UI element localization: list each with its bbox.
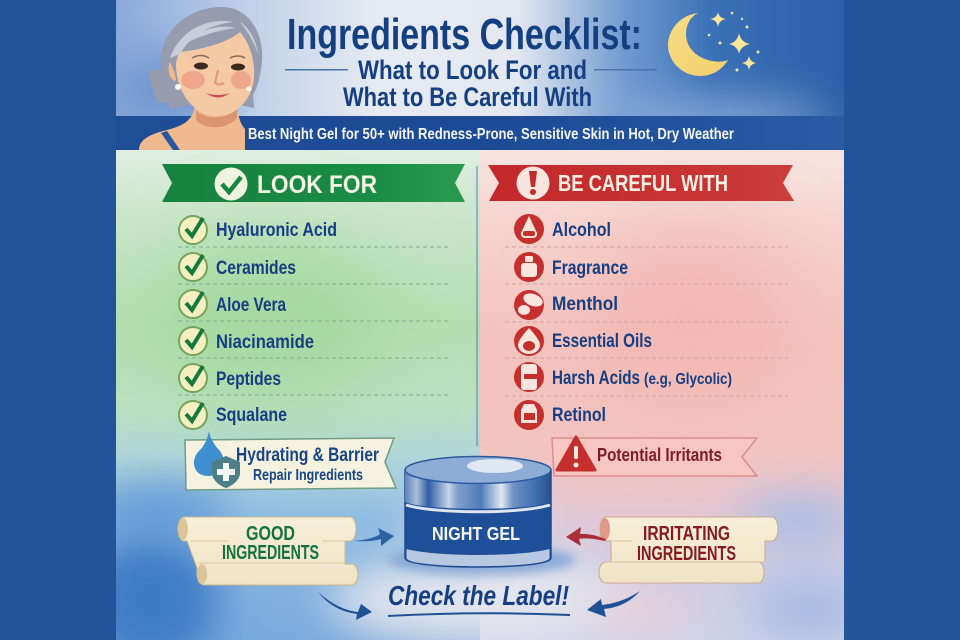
item: alcohol bbox=[514, 214, 611, 244]
item: squalane: Squalane bbox=[216, 404, 287, 426]
scroll: good ingredients bbox=[178, 517, 358, 585]
item: fragrance: Fragrance bbox=[552, 257, 628, 279]
item: aloe vera: Aloe Vera bbox=[216, 294, 286, 316]
icon: warning triangle bbox=[557, 437, 595, 470]
panel: be careful background bbox=[480, 150, 844, 640]
jar: night gel bbox=[405, 456, 551, 567]
item: menthol bbox=[514, 290, 618, 320]
scroll: good ingredients: INGREDIENTS bbox=[222, 542, 319, 564]
panel: header background bbox=[116, 0, 844, 116]
bottom colour wash bbox=[80, 230, 870, 640]
jar label: NIGHT GEL bbox=[432, 523, 520, 544]
callout: hydrating and barrier repair ingredients: Hydrating & Barrier bbox=[236, 445, 379, 466]
item: peptides bbox=[179, 364, 281, 392]
item: squalane bbox=[179, 401, 287, 429]
subtitle bbox=[343, 55, 592, 112]
scroll: irritating ingredients: IRRITATING bbox=[643, 523, 730, 545]
ribbon: be careful with bbox=[488, 165, 794, 201]
scroll: irritating ingredients bbox=[599, 517, 778, 583]
item: essential oils: Essential Oils bbox=[552, 330, 652, 352]
ribbon: be careful with: BE CAREFUL WITH bbox=[558, 170, 728, 196]
item: essential oils bbox=[514, 326, 652, 356]
callout: hydrating and barrier repair ingredients: Repair Ingredients bbox=[253, 467, 363, 484]
item: retinol: Retinol bbox=[552, 404, 606, 426]
arrow: lower left bbox=[318, 592, 372, 620]
item: hyaluronic acid bbox=[179, 216, 337, 244]
panel: look for background bbox=[116, 150, 480, 640]
subtitle: What to Be Careful With bbox=[343, 82, 592, 112]
item: harsh acids bbox=[514, 362, 732, 392]
item: niacinamide: Niacinamide bbox=[216, 331, 314, 353]
callout: potential irritants bbox=[552, 437, 757, 476]
item: fragrance bbox=[514, 252, 628, 282]
title: Ingredients Checklist: bbox=[287, 10, 642, 59]
ribbon: look for: LOOK FOR bbox=[257, 171, 377, 199]
portrait: woman with grey hair bbox=[139, 7, 262, 150]
item: peptides: Peptides bbox=[216, 368, 281, 390]
scroll: irritating ingredients: INGREDIENTS bbox=[637, 543, 736, 565]
item: ceramides: Ceramides bbox=[216, 257, 296, 279]
arrow: good to jar bbox=[354, 528, 394, 546]
panel: subtitle band bbox=[116, 116, 844, 150]
callout: potential irritants: Potential Irritants bbox=[597, 445, 722, 465]
item: aloe vera bbox=[179, 290, 286, 318]
subtitle: What to Look For and bbox=[358, 55, 587, 85]
callout: hydrating and barrier repair ingredients bbox=[185, 431, 396, 490]
item: alcohol: Alcohol bbox=[552, 219, 611, 241]
item: ceramides bbox=[179, 253, 296, 281]
item: hyaluronic acid: Hyaluronic Acid bbox=[216, 219, 337, 241]
item: harsh acids: (e.g, Glycolic) bbox=[644, 371, 732, 388]
arrow: lower right bbox=[587, 591, 640, 617]
item: menthol: Menthol bbox=[552, 293, 618, 315]
item: retinol bbox=[514, 400, 606, 430]
icon: medical shield bbox=[212, 456, 240, 488]
scroll: good ingredients: GOOD bbox=[246, 523, 295, 545]
item: harsh acids: Harsh Acids bbox=[552, 367, 640, 389]
ribbon: look for bbox=[162, 164, 465, 202]
centre divider bbox=[476, 166, 478, 446]
list: be careful with bbox=[514, 214, 732, 430]
arrow: irritating to jar bbox=[566, 527, 606, 546]
item: niacinamide bbox=[179, 327, 314, 355]
icon: water drop bbox=[194, 431, 224, 476]
underline bbox=[388, 613, 570, 616]
list: look for bbox=[179, 216, 337, 429]
icon: moon and stars bbox=[668, 12, 760, 76]
jar shadow bbox=[388, 545, 576, 575]
subtitle band text: Best Night Gel for 50+ with Redness-Prone, Sensitive Skin in Hot, Dry Weather bbox=[248, 126, 734, 143]
check the label: Check the Label! bbox=[388, 580, 569, 611]
